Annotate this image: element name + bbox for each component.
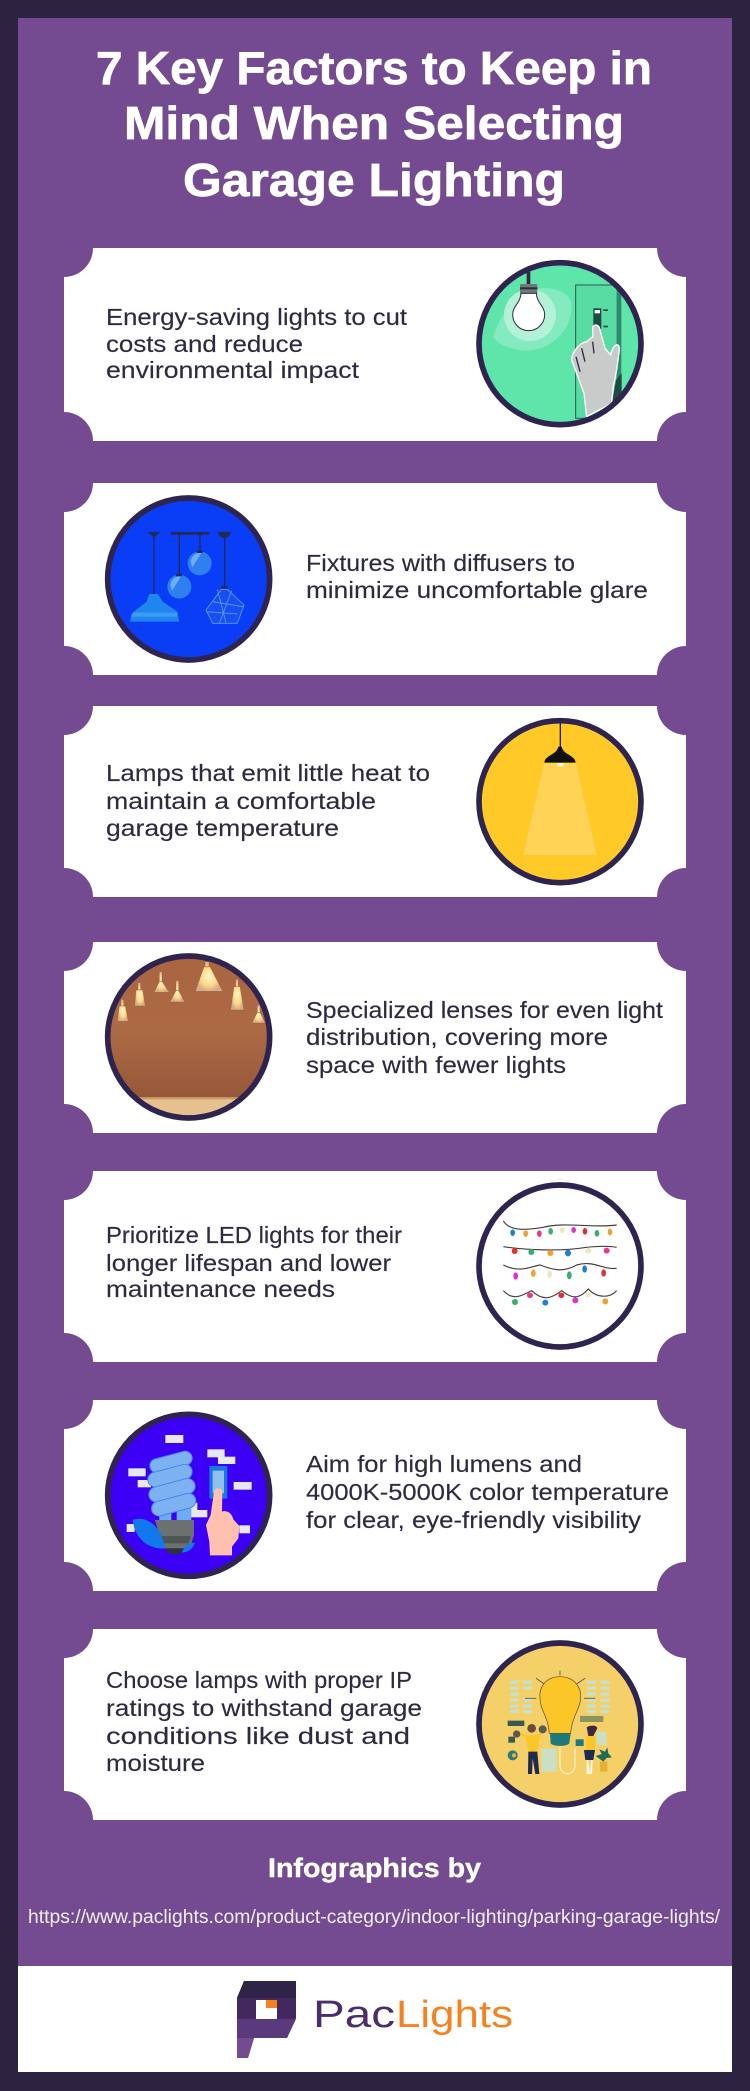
- title: [96, 42, 652, 206]
- logo mark: [237, 1981, 296, 2058]
- text: factor 5: Prioritize LED lights for their: [106, 1222, 402, 1248]
- panel: factor 1 energy-saving: [64, 248, 686, 441]
- text: factor 2: Fixtures with diffusers to: [306, 550, 575, 576]
- text: factor 2: minimize uncomfortable glare: [306, 577, 648, 603]
- text: factor 7: ratings to withstand garage: [106, 1695, 422, 1721]
- panel: factor 7 IP ratings: [64, 1629, 686, 1820]
- text: factor 7: moisture: [106, 1750, 205, 1776]
- credit heading: Infographics by: [268, 1853, 481, 1883]
- logo wordmark: [313, 1994, 513, 2036]
- text: factor 3: maintain a comfortable: [106, 788, 376, 814]
- title: 7 Key Factors to Keep in: [96, 42, 652, 94]
- text: factor 3: garage temperature: [106, 815, 339, 841]
- text: factor 5: maintenance needs: [106, 1276, 335, 1302]
- text: factor 3: [106, 760, 430, 841]
- text: factor 4: distribution, covering more: [306, 1024, 608, 1050]
- logo wordmark: Lights: [396, 1994, 513, 2036]
- logo wordmark: Pac: [313, 1994, 395, 2036]
- text: factor 6: for clear, eye-friendly visibility: [306, 1507, 641, 1533]
- icon: brick wall with lights: [104, 953, 272, 1121]
- text: factor 1: costs and reduce: [106, 331, 303, 357]
- text: factor 4: [306, 997, 663, 1078]
- text: factor 7: Choose lamps with proper IP: [106, 1667, 412, 1693]
- text: factor 1: [106, 304, 408, 383]
- icon: pendant lamps: [108, 498, 270, 660]
- footer panel: [18, 1966, 732, 2072]
- text: factor 5: [106, 1222, 402, 1302]
- icon: string lights: [479, 1185, 641, 1347]
- text: factor 1: environmental impact: [106, 357, 360, 383]
- text: factor 3: Lamps that emit little heat to: [106, 760, 430, 786]
- text: factor 6: 4000K-5000K color temperature: [306, 1479, 669, 1505]
- title: Mind When Selecting: [124, 97, 624, 149]
- icon: hanging lamp with beam: [479, 721, 641, 883]
- panel: factor 6 lumens: [64, 1400, 686, 1591]
- panel: factor 2 diffusers: [64, 483, 686, 675]
- icon: bulb and hand on switch: [479, 263, 641, 425]
- text: factor 6: Aim for high lumens and: [306, 1451, 582, 1477]
- text: factor 1: Energy-saving lights to cut: [106, 304, 408, 330]
- panel: factor 5 LED: [64, 1171, 686, 1362]
- icon: big bulb with people: [479, 1643, 641, 1805]
- text: factor 4: Specialized lenses for even light: [306, 997, 663, 1023]
- text: factor 7: [106, 1667, 422, 1776]
- title: Garage Lighting: [183, 154, 565, 206]
- panel: factor 4 lenses: [64, 940, 686, 1141]
- text: factor 2: [306, 550, 648, 603]
- text: factor 6: [306, 1451, 669, 1533]
- icon: spiral bulb and switch: [108, 1414, 270, 1576]
- text: factor 7: conditions like dust and: [106, 1723, 410, 1749]
- text: factor 5: longer lifespan and lower: [106, 1250, 391, 1276]
- panel: factor 3 low heat: [64, 706, 686, 897]
- text: factor 4: space with fewer lights: [306, 1052, 566, 1078]
- source url: https://www.paclights.com/product-category/indoor-lighting/parking-garage-lights/: [28, 1907, 721, 1928]
